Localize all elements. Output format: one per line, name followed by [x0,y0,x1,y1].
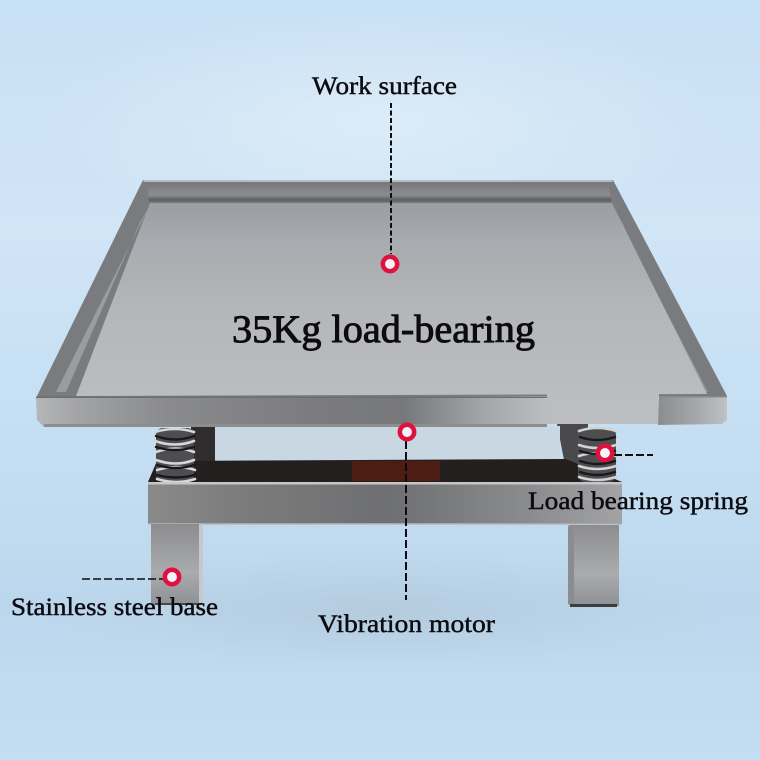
label: load bearing spring: Load bearing spring [528,488,749,515]
right leg [568,525,619,607]
callout: vibration motor [318,425,496,638]
motor [352,461,440,481]
marker [383,257,397,271]
tray cut-out panel [547,394,659,424]
marker [400,425,414,439]
left spring [155,428,195,482]
marker [598,446,612,460]
label: stainless steel base: Stainless steel base [11,594,218,621]
leader line [82,578,164,580]
marker [165,570,179,584]
leader line [390,103,392,254]
headline: load bearing: 35Kg load-bearing [232,308,535,351]
label: work surface: Work surface [312,73,457,100]
left leg [151,524,203,605]
back legs and inner frame [148,424,622,482]
leader line [614,454,653,456]
label: vibration motor: Vibration motor [318,611,496,638]
tray [36,180,727,427]
product: vibrating table [36,180,727,607]
callout: work surface [312,73,457,271]
callout: load bearing spring [528,446,749,515]
tray front lip [36,396,547,427]
leader line [405,441,407,600]
right spring [578,428,616,482]
callout: stainless steel base [11,570,218,621]
base frame [148,482,622,524]
